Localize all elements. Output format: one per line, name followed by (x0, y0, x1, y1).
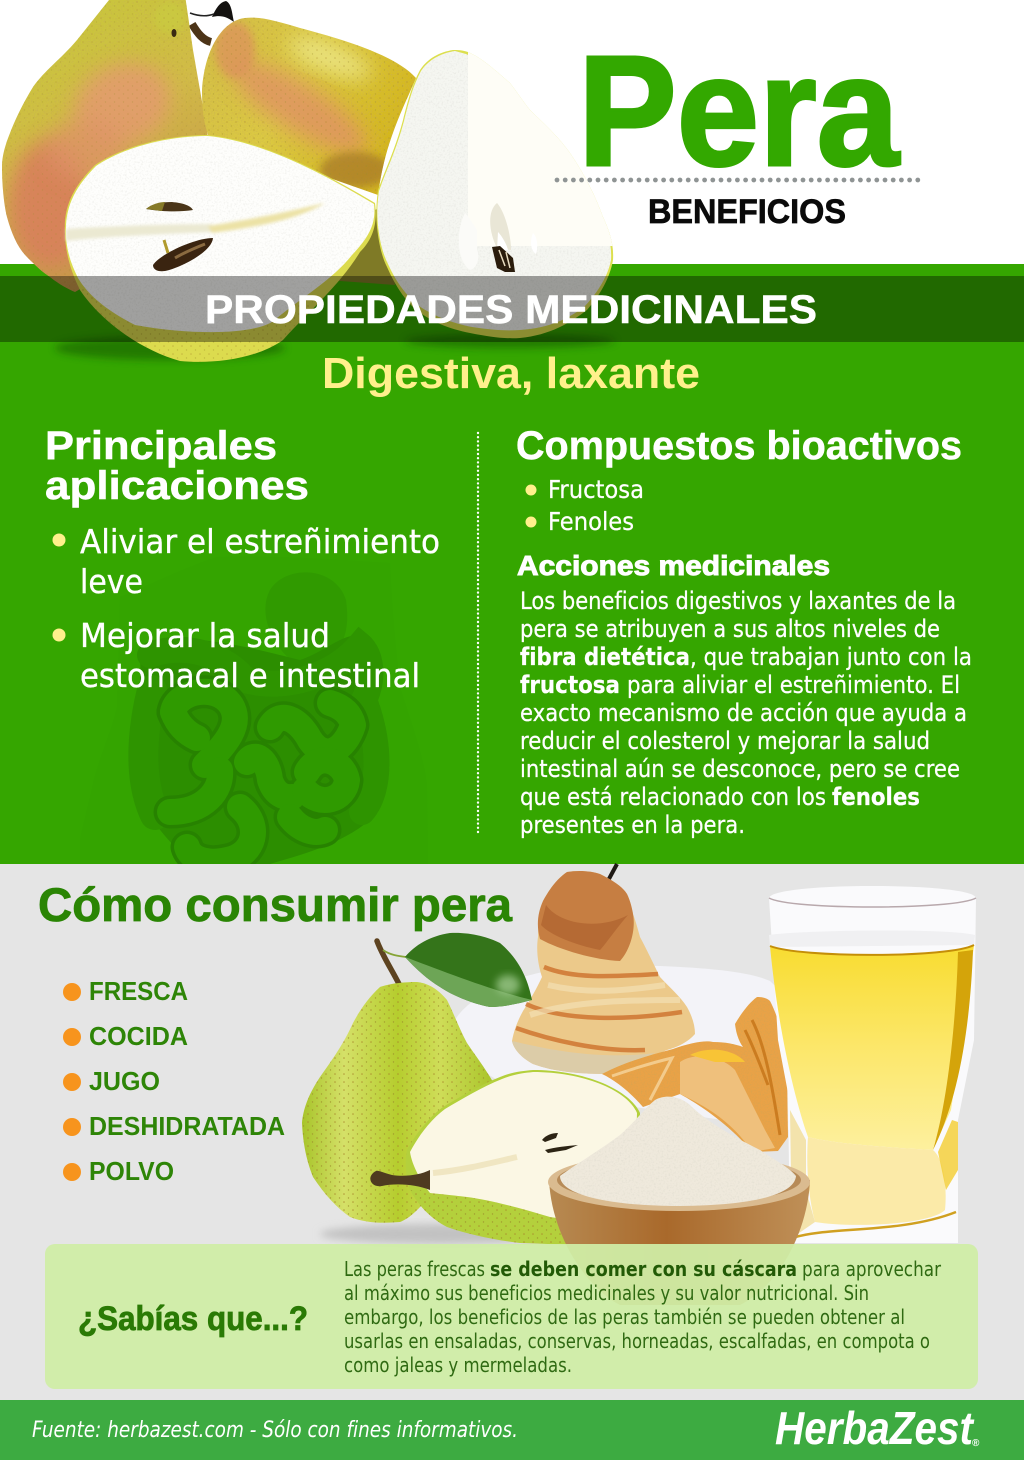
subtitle: BENEFICIOS (648, 193, 846, 231)
paragraph: fructosa (520, 671, 620, 699)
list: consumption forms: FRESCA (89, 976, 188, 1006)
heading: Principales (45, 424, 277, 468)
list item two (52, 616, 420, 695)
cut pear horizontal (65, 135, 376, 362)
glass of juice (769, 886, 976, 1243)
callout text: como jaleas y mermeladas. (344, 1353, 572, 1377)
leaf (383, 933, 532, 1007)
illustration: red-yellow whole pears and cut halves (0, 0, 620, 362)
back olive shadow (326, 205, 395, 285)
paragraph: para aliviar el estreñimiento. El (627, 671, 960, 699)
heading: como consumir: Cómo consumir pera (38, 878, 513, 931)
callout text: al máximo sus beneficios medicinales y su valor nutricional. Sin (344, 1281, 869, 1305)
list item two: Mejorar la salud (80, 616, 330, 655)
panel: principales aplicaciones (45, 424, 440, 695)
list: consumption forms: POLVO (89, 1156, 174, 1186)
callout text: Las peras frescas (344, 1257, 485, 1281)
list: consumption forms: DESHIDRATADA (89, 1111, 285, 1141)
cut green pear (370, 1070, 640, 1245)
paragraph: fibra dietética (520, 643, 690, 671)
cut pear vertical (372, 44, 620, 342)
panel: sabias que (45, 1244, 978, 1389)
green pear (302, 941, 493, 1223)
paragraph (520, 587, 972, 839)
bowl (548, 1097, 810, 1305)
plate (454, 965, 790, 1130)
dried pears (602, 997, 788, 1152)
compounds list (526, 475, 644, 536)
compounds list: Fructosa (548, 475, 644, 504)
logo: ® (972, 1438, 980, 1449)
illustration: pear products (302, 864, 976, 1305)
properties subheading: Digestiva, laxante (322, 349, 700, 398)
heading band (0, 276, 1024, 342)
paragraph: exacto mecanismo de acción que ayuda a (520, 699, 967, 727)
panel: footer (0, 1400, 1024, 1460)
list item two: estomacal e intestinal (80, 656, 420, 695)
callout text: embargo, los beneficios de las peras también se pueden obtener al (344, 1305, 905, 1329)
list item one: Aliviar el estreñimiento (80, 522, 440, 561)
paragraph: que está relacionado con los (520, 783, 826, 811)
compounds list: Fenoles (548, 507, 634, 536)
panel: green properties section (0, 264, 1024, 864)
paragraph: pera se atribuyen a sus altos niveles de (520, 615, 940, 643)
list item one (52, 522, 440, 601)
column divider (477, 433, 479, 836)
paragraph: reducir el colesterol y mejorar la salud (520, 727, 930, 755)
list: consumption forms: COCIDA (89, 1021, 188, 1051)
logo: HerbaZest (775, 1402, 974, 1454)
stem (190, 1, 234, 42)
paragraph: fenoles (832, 783, 920, 811)
callout heading: ¿Sabías que...? (78, 1300, 308, 1338)
background: header white (0, 0, 1024, 264)
callout text (344, 1257, 942, 1377)
band heading text: PROPIEDADES MEDICINALES (205, 288, 817, 332)
whole pear left (0, 0, 220, 295)
heading: aplicaciones (45, 464, 309, 508)
paragraph: Los beneficios digestivos y laxantes de la (520, 587, 956, 615)
callout text: para aprovechar (802, 1257, 942, 1281)
source note: Fuente: herbazest.com - Sólo con fines informativos. (32, 1418, 518, 1443)
heading: Compuestos bioactivos (516, 424, 962, 468)
whole pear right (200, 15, 420, 200)
paragraph: , que trabajan junto con la (690, 643, 972, 671)
panel: compuestos bioactivos (516, 424, 972, 839)
cooked pear pastry (512, 864, 695, 1074)
list: consumption forms (63, 976, 285, 1186)
subheading: Acciones medicinales (517, 550, 830, 581)
paragraph: presentes en la pera. (520, 811, 745, 839)
panel: grey consumption section (0, 864, 1024, 1400)
soft floor shadow (320, 1224, 560, 1244)
shadow under pears (55, 334, 615, 360)
paragraph: intestinal aún se desconoce, pero se cree (520, 755, 960, 783)
dotted divider under title (557, 178, 923, 182)
heading (45, 424, 309, 508)
illustration: torso and intestines (128, 572, 390, 864)
callout text: se deben comer con su cáscara (490, 1257, 797, 1281)
title: Pera (578, 24, 901, 199)
list item one: leve (80, 562, 143, 601)
flour (560, 1097, 796, 1206)
list: consumption forms: JUGO (89, 1066, 160, 1096)
